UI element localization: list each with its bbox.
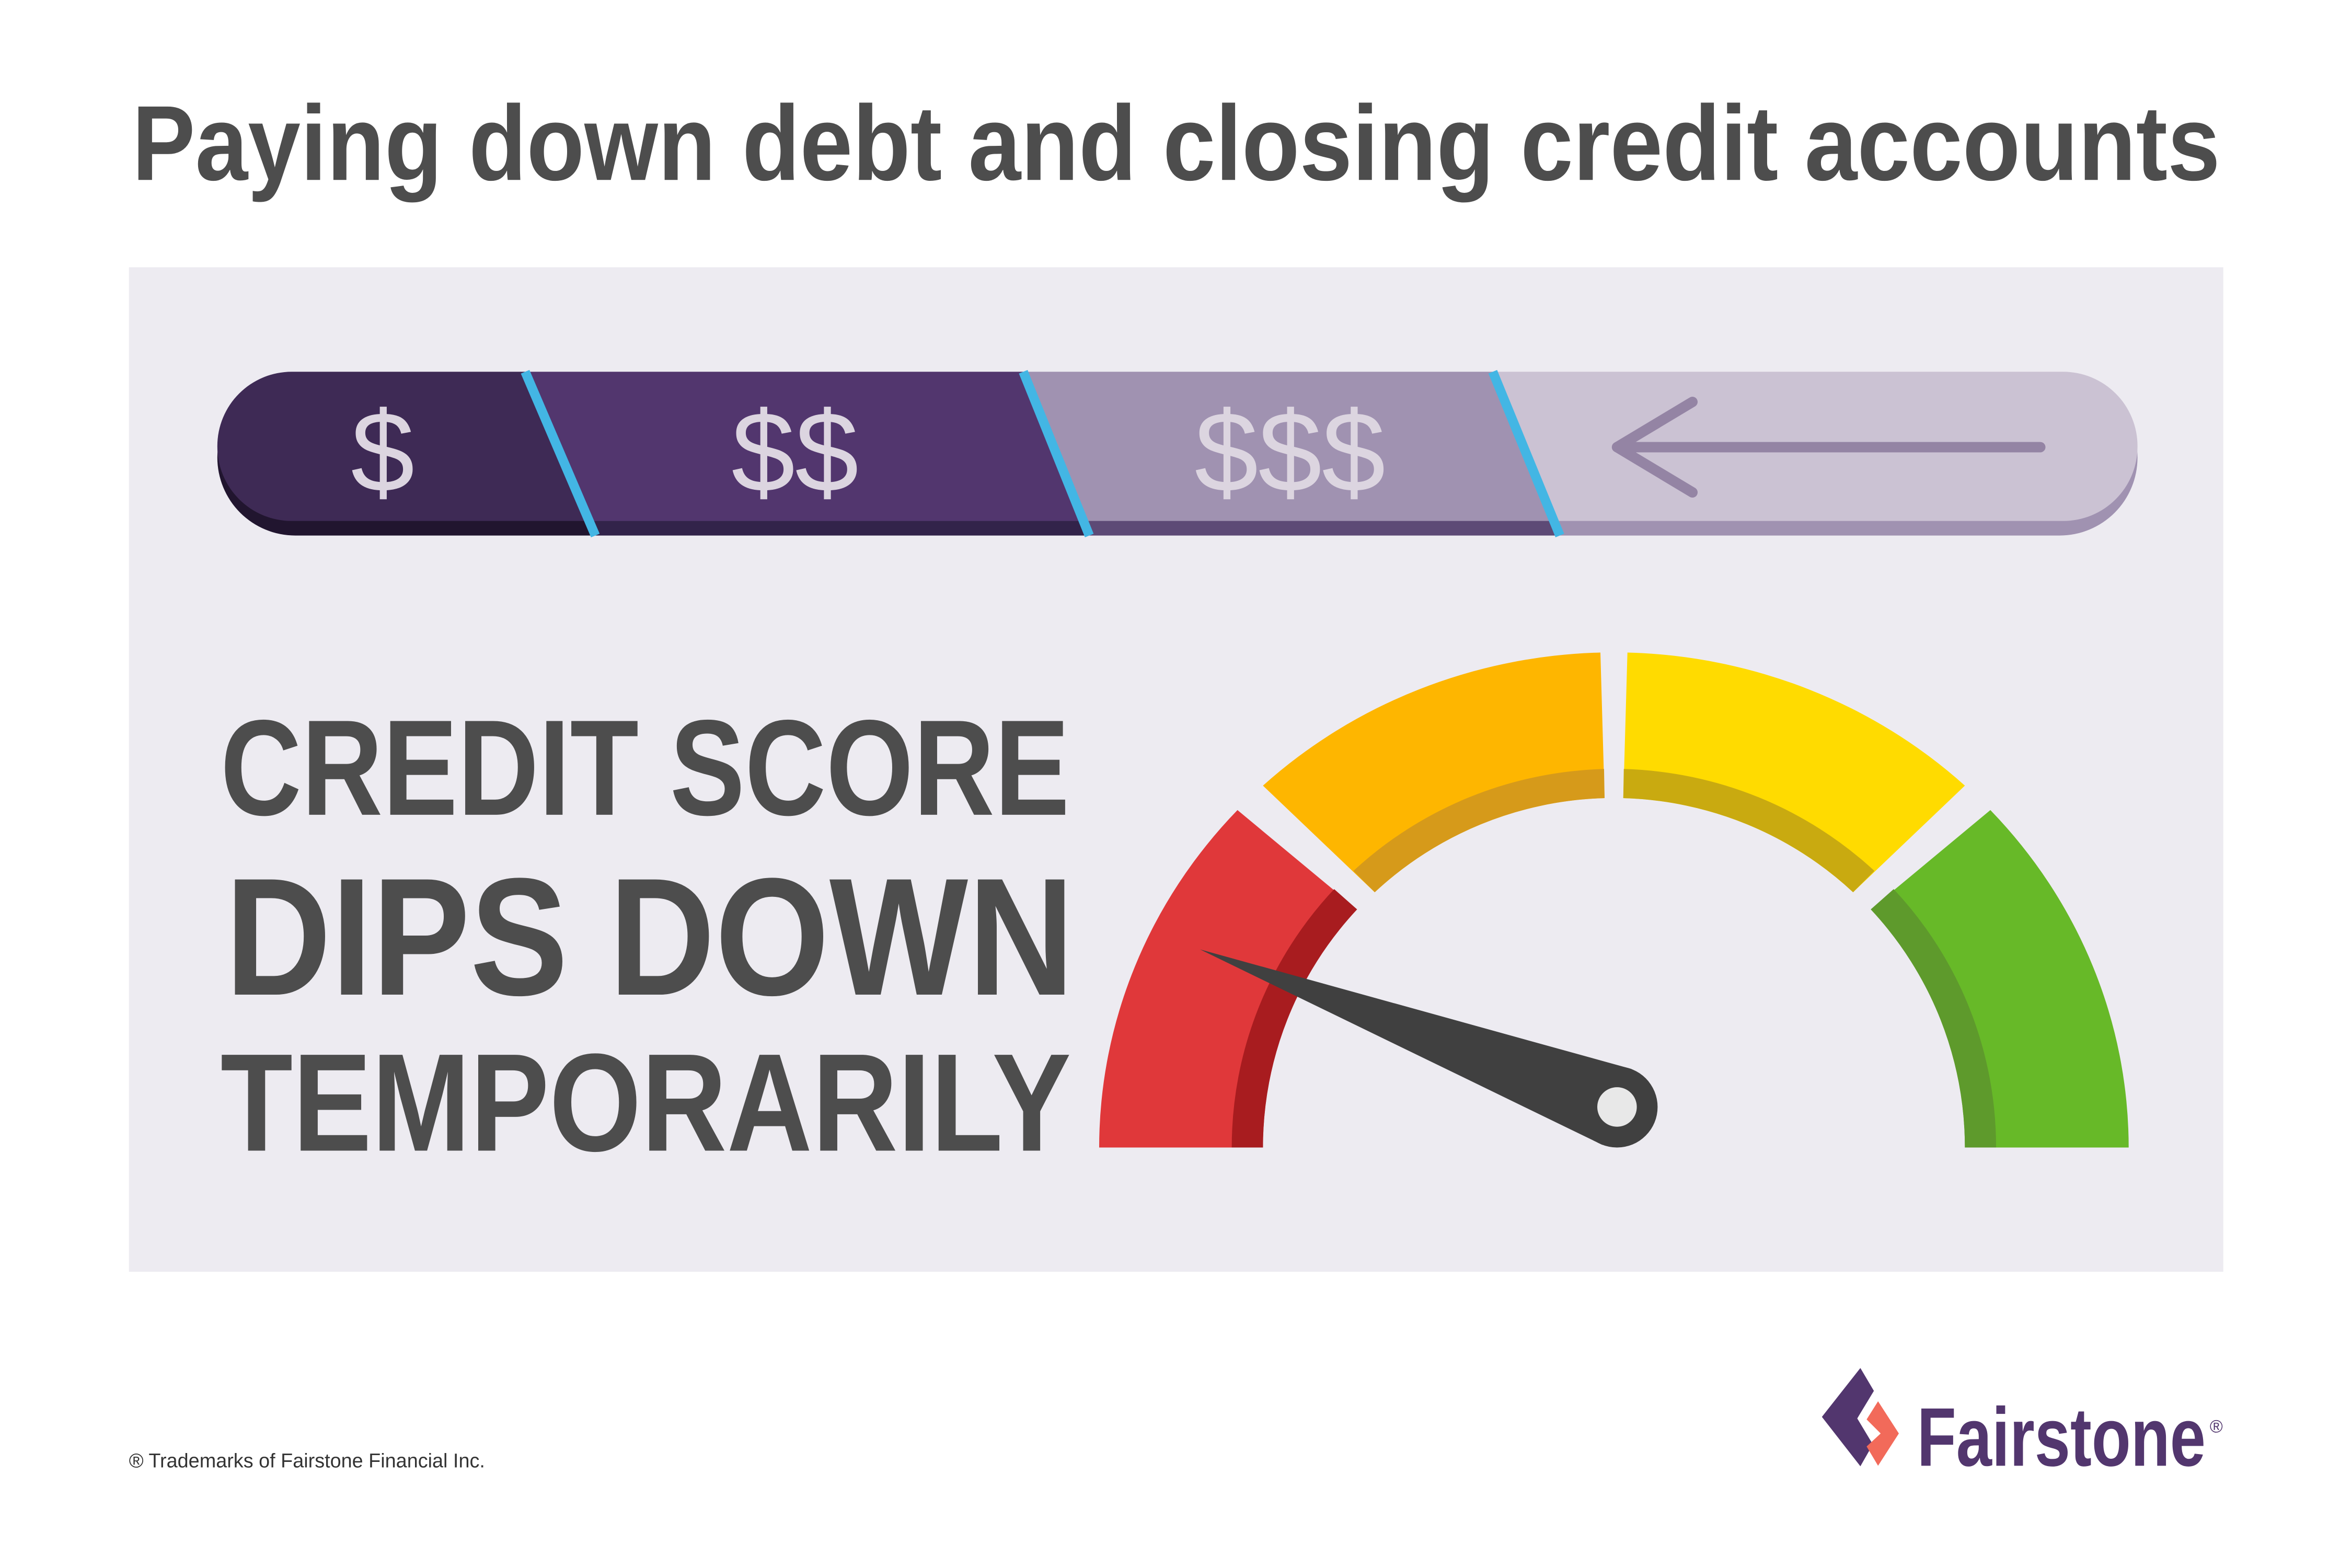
gauge: orange segment bbox=[1263, 652, 1605, 892]
gauge bbox=[1099, 652, 2129, 1148]
icon: left arrow bbox=[1617, 402, 2040, 492]
headline text: TEMPORARILY bbox=[221, 1025, 1071, 1180]
panel: main bbox=[129, 267, 2223, 1272]
logo wordmark: Fairstone bbox=[1917, 1390, 2206, 1483]
gauge: red segment bbox=[1099, 810, 1357, 1148]
headline text: CREDIT SCORE bbox=[221, 692, 1069, 844]
headline text bbox=[221, 692, 1074, 1180]
gauge: yellow segment bbox=[1623, 652, 1965, 892]
label: $$: $$ bbox=[731, 388, 859, 516]
logo: Fairstone: ® bbox=[2210, 1417, 2223, 1437]
icon: logo diamond bbox=[1822, 1368, 1899, 1466]
logo: Fairstone bbox=[1822, 1368, 2223, 1483]
headline text: DIPS DOWN bbox=[225, 843, 1074, 1030]
gauge: green segment bbox=[1871, 810, 2129, 1148]
footer trademark note: ® Trademarks of Fairstone Financial Inc. bbox=[129, 1450, 485, 1472]
label: $$$: $$$ bbox=[1195, 388, 1386, 516]
label: $: $ bbox=[351, 388, 414, 516]
gauge: needle bbox=[1200, 950, 1657, 1148]
progress bar bbox=[208, 364, 2148, 541]
